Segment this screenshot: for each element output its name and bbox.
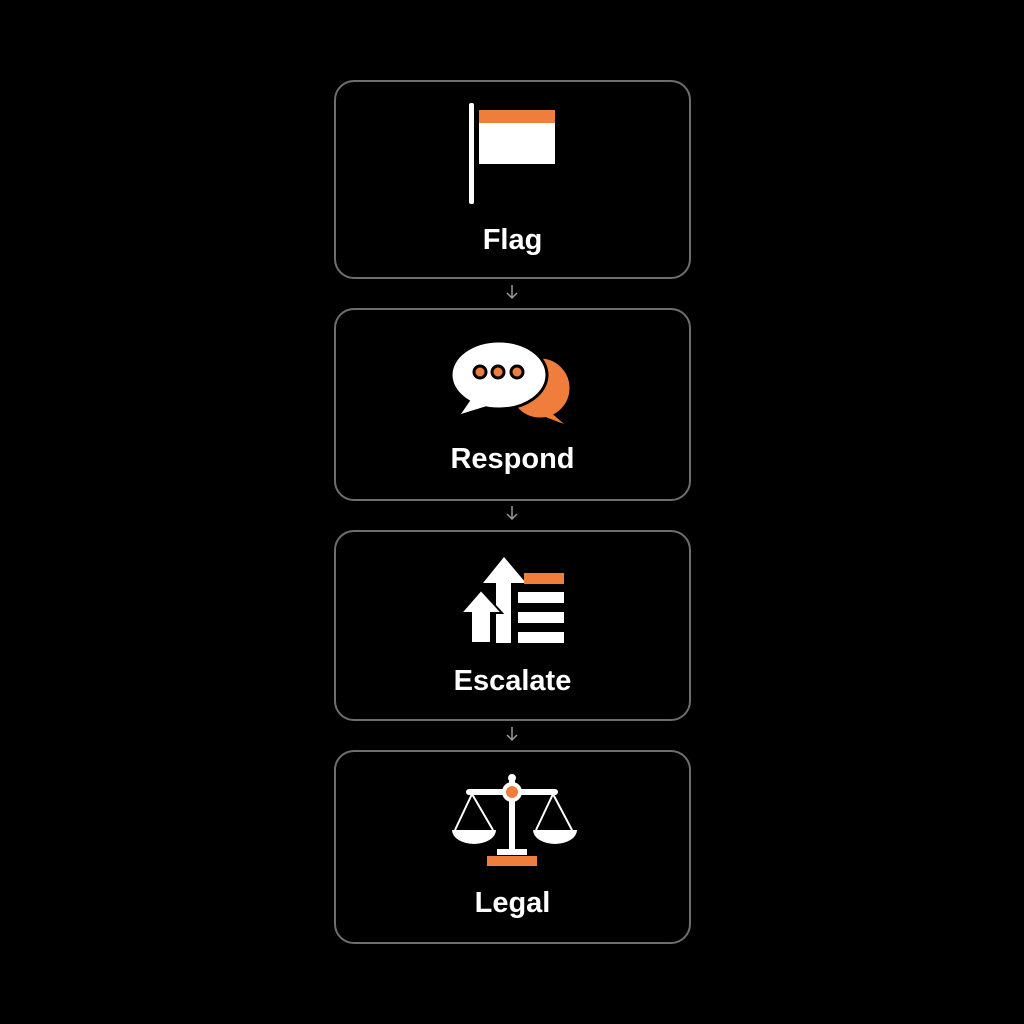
icon: scales <box>452 774 577 866</box>
label: Respond: Respond <box>450 443 575 475</box>
panel: flag <box>334 80 691 279</box>
icon: speech bubbles <box>451 341 571 424</box>
icon: escalate <box>461 557 564 643</box>
arrow 1 <box>506 285 518 299</box>
panel: legal <box>334 750 691 944</box>
arrow 3 <box>506 727 518 741</box>
label: Escalate: Escalate <box>454 665 571 697</box>
label: Flag: Flag <box>483 224 542 256</box>
icon: flag <box>469 103 555 204</box>
label: Legal: Legal <box>475 887 550 919</box>
arrow 2 <box>506 506 518 520</box>
panel: escalate <box>334 530 691 721</box>
panel: respond <box>334 308 691 501</box>
